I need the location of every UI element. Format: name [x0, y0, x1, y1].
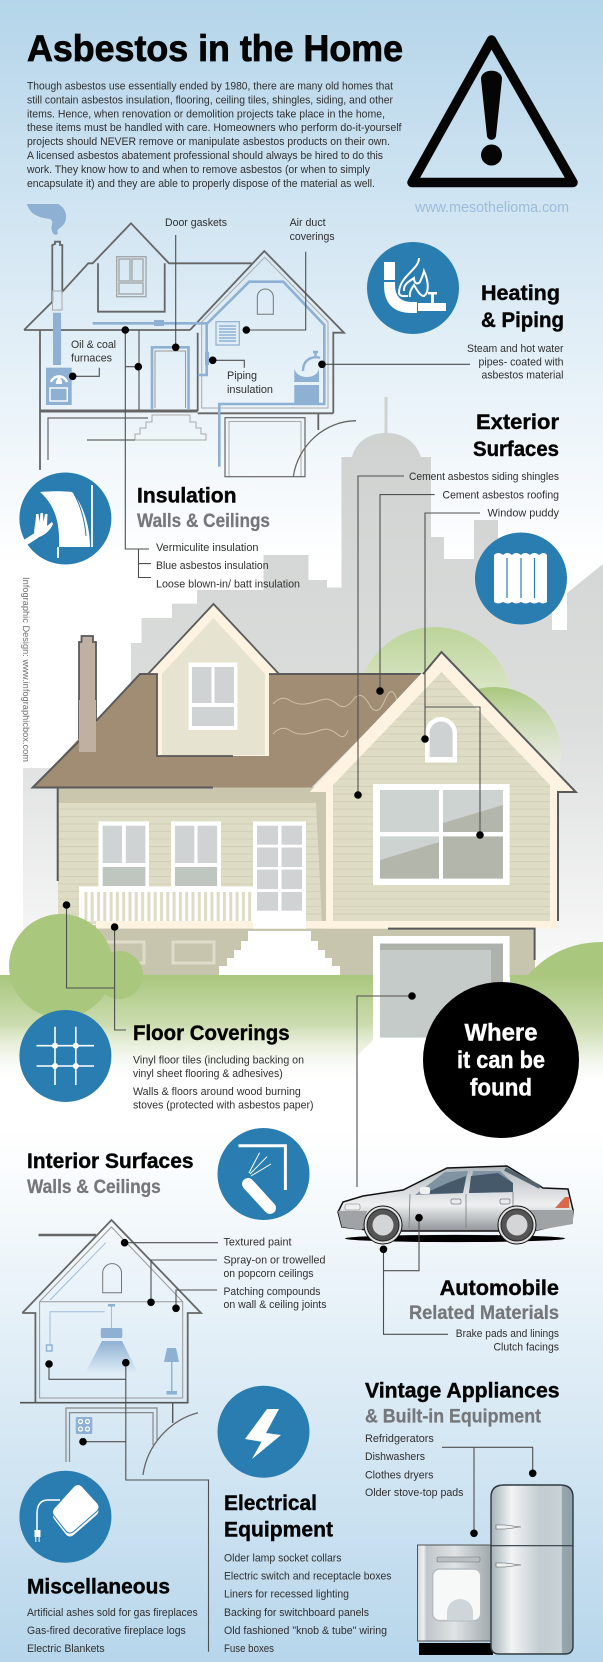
main roof	[33, 674, 423, 788]
front steps	[219, 931, 340, 975]
heading: heating and piping	[481, 281, 564, 332]
intro paragraph: these items must be handled with care. Homeowners who perform do-it-yourself	[27, 122, 402, 134]
icon: interior spray	[218, 1128, 310, 1220]
heading: exterior surfaces: Exterior	[476, 410, 560, 434]
callout: where it can be found: Where	[464, 1020, 538, 1047]
schematic interior house	[20, 1220, 201, 1475]
callout: where it can be found	[423, 982, 579, 1138]
porch railing	[79, 886, 388, 929]
furnace	[46, 368, 72, 405]
vertical credit: Infographic Design: www.infographicbox.com	[20, 577, 31, 762]
appliance items: Refridgerators	[365, 1433, 434, 1445]
heading: vintage appliances: Vintage Appliances	[365, 1379, 560, 1403]
intro paragraph: encapsulate it) and they are able to properly dispose of the material as well.	[27, 178, 375, 190]
icon: electrical	[218, 1386, 310, 1478]
intro paragraph: work. They know how to and when to remove asbestos (or when to simply	[26, 164, 370, 176]
heating description	[467, 343, 564, 382]
heading: exterior surfaces	[473, 410, 560, 461]
heading: heating and piping: Heating	[481, 281, 560, 305]
exterior items: Window puddy	[488, 508, 559, 520]
boiler	[294, 352, 320, 403]
heading: heating and piping: & Piping	[481, 308, 564, 332]
appliance items	[365, 1433, 464, 1499]
appliance items: Older stove-top pads	[365, 1487, 464, 1499]
chimney	[79, 636, 96, 752]
heading: interior surfaces: Walls & Ceilings	[27, 1176, 161, 1198]
floor coverings text: Vinyl floor tiles (including backing on	[133, 1054, 304, 1066]
automobile items: Brake pads and linings	[456, 1328, 559, 1340]
icon: warning triangle	[412, 40, 573, 182]
schematic house labels: Oil & coal	[71, 339, 116, 351]
electrical items	[224, 1553, 392, 1655]
lower left windows	[98, 821, 221, 887]
dormer window	[188, 662, 238, 730]
chimney smoke	[27, 204, 66, 235]
heading: electrical equipment: Electrical	[224, 1491, 317, 1515]
website url: www.mesothelioma.com	[414, 200, 569, 216]
interior leaders	[45, 1239, 218, 1652]
exterior items	[409, 471, 559, 520]
insulation items: Vermiculite insulation	[156, 542, 258, 554]
exterior leaders	[354, 476, 484, 839]
basement and garage	[48, 418, 356, 477]
interior items: Textured paint	[224, 1236, 292, 1248]
intro paragraph	[26, 80, 402, 190]
callout: where it can be found: found	[470, 1075, 532, 1102]
electrical items: Old fashioned "knob & tube" wiring	[224, 1625, 387, 1637]
automobile leaders	[380, 1214, 448, 1334]
garage door	[373, 936, 510, 1056]
house foundation	[58, 925, 535, 977]
automobile items	[456, 1328, 559, 1354]
floor coverings text: stoves (protected with asbestos paper)	[133, 1100, 314, 1112]
heading: insulation	[137, 484, 270, 532]
front door	[253, 821, 306, 929]
heading: automobile: Automobile	[440, 1276, 559, 1300]
roof squiggles	[273, 692, 398, 737]
heading: automobile	[409, 1276, 559, 1324]
floor coverings text: Walls & floors around wood burning	[133, 1086, 301, 1098]
entry steps	[135, 415, 206, 440]
electrical items: Liners for recessed lighting	[224, 1589, 349, 1601]
interior outline	[20, 1220, 201, 1403]
heading: electrical equipment: Equipment	[224, 1518, 333, 1542]
heading: floor coverings: Floor Coverings	[133, 1021, 290, 1045]
insulation items: Loose blown-in/ batt insulation	[156, 578, 300, 590]
icon: heating and piping	[367, 242, 459, 334]
heading: electrical equipment	[224, 1491, 333, 1542]
background city skyline	[23, 397, 603, 985]
heading: exterior surfaces: Surfaces	[473, 437, 559, 461]
heading: automobile: Related Materials	[409, 1302, 559, 1324]
background bushes	[358, 627, 561, 821]
appliance items: Dishwashers	[365, 1451, 425, 1463]
intro paragraph: items. Hence, when renovation or demolition projects take place in the home,	[27, 108, 385, 120]
arched window	[257, 289, 273, 314]
blue pipes	[57, 282, 324, 467]
exterior items: Cement asbestos roofing	[442, 490, 559, 502]
miscellaneous items: Artificial ashes sold for gas fireplaces	[27, 1607, 198, 1619]
heating description: pipes- coated with	[478, 356, 564, 368]
icon: miscellaneous blanket	[19, 1471, 111, 1563]
heading: interior surfaces	[27, 1149, 194, 1198]
dormer window	[117, 257, 146, 297]
icon: insulation	[17, 472, 111, 564]
electrical items: Fuse boxes	[224, 1643, 274, 1655]
insulation items: Blue asbestos insulation	[156, 560, 268, 572]
schematic house labels: Piping	[227, 370, 257, 382]
title: Asbestos in the Home	[27, 27, 403, 69]
electrical panel	[76, 1417, 92, 1434]
intro paragraph: projects should NEVER remove or manipulate asbestos products on their own.	[27, 136, 390, 148]
electrical items: Electric switch and receptacle boxes	[224, 1571, 392, 1583]
illustration: dishwasher	[418, 1545, 493, 1655]
floor lamp	[164, 1348, 179, 1394]
schematic house labels: insulation	[227, 384, 273, 396]
electrical items: Older lamp socket collars	[224, 1553, 342, 1565]
interior door	[152, 347, 188, 410]
exterior items: Cement asbestos siding shingles	[409, 471, 559, 483]
heading: miscellaneous: Miscellaneous	[27, 1574, 170, 1598]
heading: insulation: Walls & Ceilings	[137, 510, 270, 532]
heating description: asbestos material	[482, 370, 564, 382]
schematic house labels: coverings	[290, 231, 335, 243]
roof and wall outline	[24, 223, 344, 470]
floor coverings text: vinyl sheet flooring & adhesives)	[133, 1068, 283, 1080]
interior items	[224, 1236, 327, 1311]
lawn	[0, 914, 603, 1085]
intro paragraph: still contain asbestos insulation, flooring, ceiling tiles, shingles, siding, and other	[27, 94, 393, 106]
house left wall with siding	[58, 787, 328, 924]
heading: interior surfaces: Interior Surfaces	[27, 1149, 194, 1173]
air vent	[216, 322, 239, 345]
schematic house labels: Air duct	[290, 217, 326, 229]
wall switch	[46, 1345, 52, 1351]
icon: exterior shingles	[475, 532, 567, 624]
interior items: on wall & ceiling joints	[224, 1299, 327, 1311]
interior items: Spray-on or trowelled	[224, 1254, 326, 1266]
large house illustration	[33, 604, 576, 977]
intro paragraph: A licensed asbestos abatement professional should always be hired to do this	[27, 150, 383, 162]
arched gable window	[425, 717, 457, 762]
floor and garage leaders	[63, 901, 416, 1187]
floor coverings text	[133, 1054, 314, 1112]
large gable window	[373, 784, 510, 885]
ceiling lamp and light	[85, 1304, 138, 1373]
insulation items	[156, 542, 300, 590]
illustration: refrigerator	[491, 1485, 573, 1654]
schematic house labels	[71, 217, 335, 396]
schematic house labels: Door gaskets	[165, 217, 227, 229]
appliance items: Clothes dryers	[365, 1469, 434, 1481]
interior items: on popcorn ceilings	[224, 1268, 314, 1280]
miscellaneous items	[27, 1607, 198, 1655]
electrical items: Backing for switchboard panels	[224, 1607, 369, 1619]
schematic house leaders	[69, 235, 470, 578]
schematic house	[24, 204, 356, 477]
chimney base over roof	[79, 700, 96, 752]
dormer	[140, 604, 285, 756]
right gable wall	[310, 652, 576, 960]
heating description: Steam and hot water	[467, 343, 564, 355]
appliance leaders	[442, 1447, 536, 1537]
schematic house labels: furnaces	[71, 352, 112, 364]
lower level outline	[66, 1403, 198, 1475]
illustration: car	[338, 1166, 573, 1244]
heading: insulation: Insulation	[137, 484, 236, 508]
interior items: Patching compounds	[224, 1286, 321, 1298]
callout: where it can be found: it can be	[457, 1047, 545, 1074]
heading: vintage appliances: & Built-in Equipment	[365, 1405, 541, 1427]
interior arched window	[103, 1264, 122, 1293]
intro paragraph: Though asbestos use essentially ended by 1980, there are many old homes that	[27, 80, 394, 92]
heading: vintage appliances	[365, 1379, 560, 1427]
automobile items: Clutch facings	[494, 1342, 559, 1354]
miscellaneous items: Electric Blankets	[27, 1643, 105, 1655]
icon: floor coverings	[19, 1010, 111, 1102]
miscellaneous items: Gas-fired decorative fireplace logs	[27, 1625, 186, 1637]
